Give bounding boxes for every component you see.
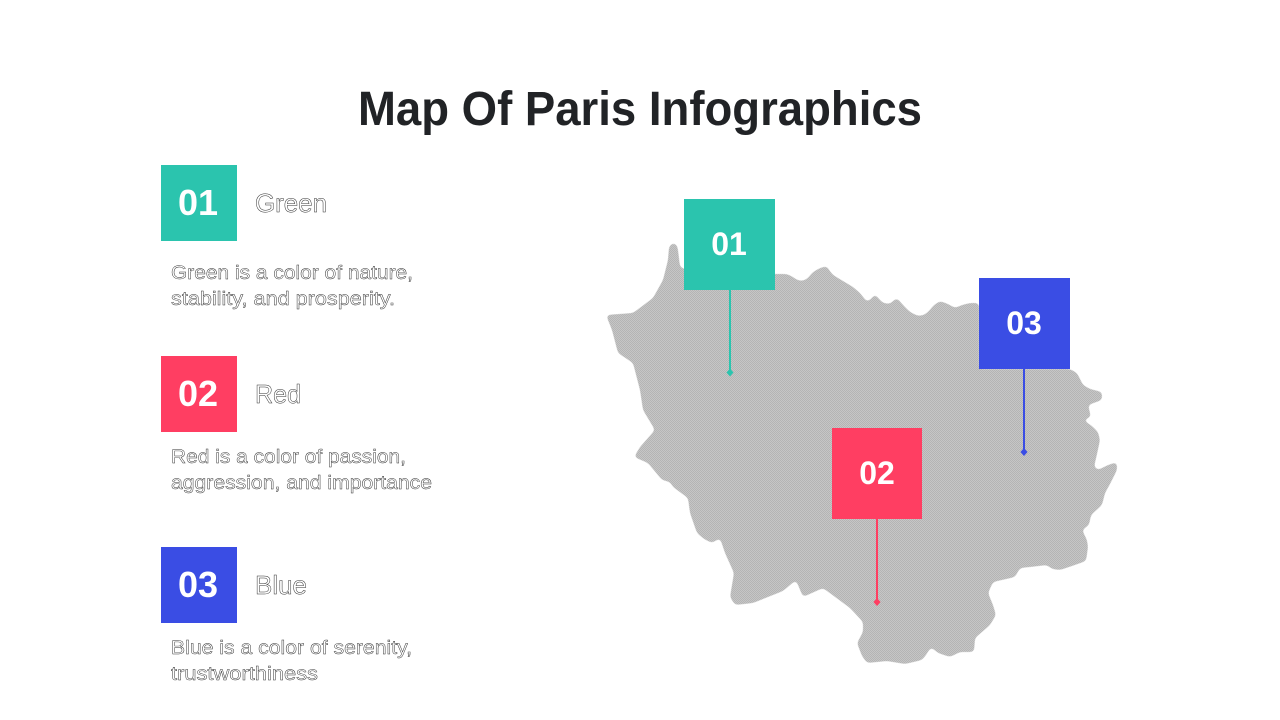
badge 01: 01 [178,182,218,223]
badge 01 [161,165,237,241]
heading: Green: Green [255,188,327,218]
pin 02 [832,428,922,606]
description: red: Red is a color of passion, [171,446,406,468]
description: blue: Blue is a color of serenity, [171,637,412,659]
description: blue [171,637,412,685]
description: blue: trustworthiness [171,663,318,685]
title: Map Of Paris Infographics [358,83,922,136]
pin 03: 03 [1006,305,1042,341]
description: green [171,262,413,310]
badge 03: 03 [178,564,218,605]
heading: Blue: Blue [255,570,307,600]
pin 01: 01 [711,226,747,262]
pin 02: 02 [859,455,895,491]
map of Paris region [606,243,1118,665]
badge 03 [161,547,237,623]
badge 02 [161,356,237,432]
description: red [171,446,432,494]
heading: Red: Red [255,379,301,409]
description: red: aggression, and importance [171,472,432,494]
pin 03 [979,278,1070,456]
description: green: Green is a color of nature, [171,262,413,284]
panel: legend item 01 green [161,165,413,310]
panel: legend item 03 blue [161,547,412,685]
description: green: stability, and prosperity. [171,288,395,310]
pin 01 [684,199,775,376]
badge 02: 02 [178,373,218,414]
panel: legend item 02 red [161,356,432,494]
